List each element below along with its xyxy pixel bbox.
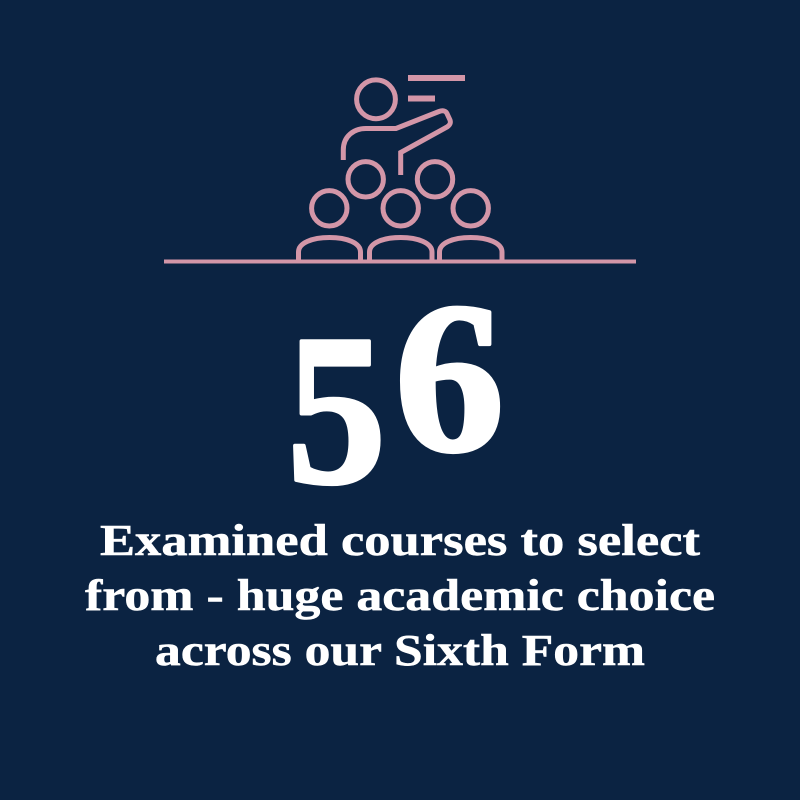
icon: student shoulders right (440, 238, 502, 261)
icon: student shoulders centre (370, 238, 432, 261)
description line 1: Examined courses to select (100, 516, 700, 565)
icon: presentation lines (408, 75, 465, 102)
icon: student head front left (312, 191, 347, 226)
icon: teacher presenting to students (298, 75, 502, 261)
description line 3: across our Sixth Form (155, 626, 645, 675)
icon: teacher head (357, 80, 395, 119)
digit 5: 5 (287, 290, 386, 529)
description text (85, 516, 715, 675)
icon: student shoulders left (298, 238, 360, 261)
icon: student head back right (417, 162, 453, 197)
description line 2: from - huge academic choice (85, 571, 715, 620)
icon: teacher body with pointing arm (343, 111, 450, 175)
icon: student head back left (348, 162, 383, 197)
big number 56 (287, 258, 504, 529)
digit 6: 6 (394, 258, 504, 497)
icon: student head front centre (383, 191, 418, 226)
divider line under icon (164, 260, 636, 264)
icon: student head front right (453, 191, 488, 226)
